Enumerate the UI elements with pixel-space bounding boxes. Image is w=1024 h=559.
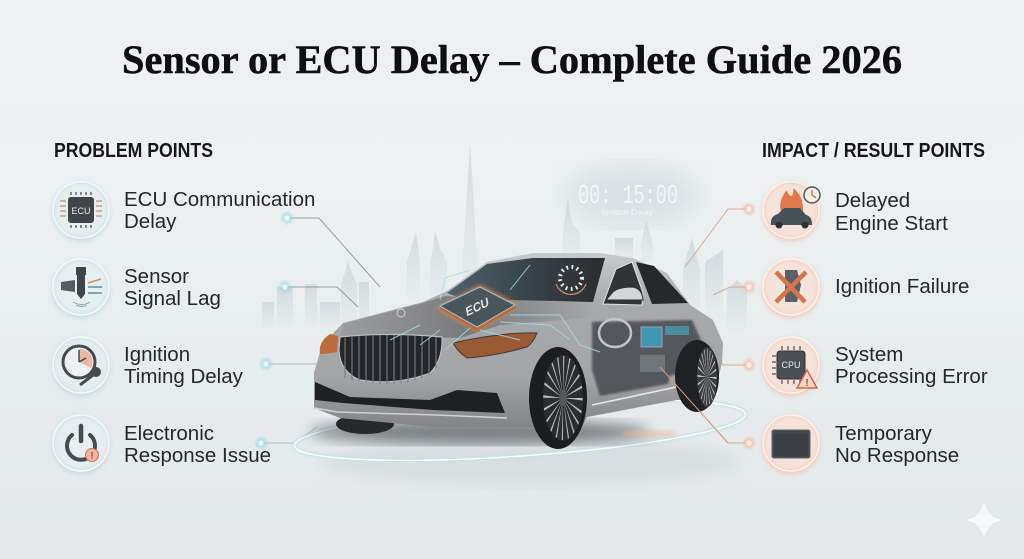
icon: crossed ignition xyxy=(763,259,819,315)
icon: blank window xyxy=(763,415,819,471)
label: Delayed xyxy=(835,189,910,212)
loading spinner xyxy=(560,267,582,289)
icon: sensor xyxy=(53,259,109,315)
label: Electronic xyxy=(124,422,214,445)
item: electronic response issue xyxy=(53,415,271,471)
heading: impact points: IMPACT / RESULT POINTS xyxy=(762,140,985,162)
timer digits: 00: 15:00 xyxy=(578,182,678,212)
chrome strip xyxy=(314,408,507,418)
item: delayed engine start xyxy=(763,182,948,238)
car shadow xyxy=(310,420,650,444)
hood xyxy=(340,296,600,338)
orange sparks xyxy=(622,430,678,438)
icon: power warning xyxy=(53,415,109,471)
chip label: ECU xyxy=(464,294,490,320)
front wheel xyxy=(529,347,587,449)
label: No Response xyxy=(835,444,959,467)
grille xyxy=(339,334,442,384)
transparent interior xyxy=(592,319,701,396)
label: Ignition xyxy=(124,343,190,366)
title: Sensor or ECU Delay – Complete Guide 2026 xyxy=(122,37,902,82)
digital timer xyxy=(566,165,698,225)
label: Ignition Failure xyxy=(835,275,969,298)
icon: CPU warning xyxy=(763,337,819,393)
label: Temporary xyxy=(835,422,933,445)
icon: CPU warning: ! xyxy=(805,378,809,389)
icon: clock and key xyxy=(53,337,109,393)
side mirror xyxy=(606,287,643,300)
lower intake xyxy=(315,382,505,413)
icon glows xyxy=(52,183,820,474)
ignition trace xyxy=(660,367,728,443)
car xyxy=(310,253,728,449)
circuit traces xyxy=(390,265,600,352)
item: sensor signal lag xyxy=(53,259,221,315)
panel: problem points xyxy=(53,140,315,471)
rear wheel xyxy=(675,340,719,412)
hood emblem xyxy=(397,309,405,317)
glowing floor ring xyxy=(293,388,747,472)
sill line xyxy=(592,385,686,405)
connector dots: impact points xyxy=(743,203,755,449)
front side window xyxy=(603,262,643,305)
icon: sparkle watermark xyxy=(966,501,1002,539)
label: Delay xyxy=(124,210,177,233)
front left tyre xyxy=(336,414,394,434)
item: ignition failure xyxy=(763,259,969,315)
windshield xyxy=(447,258,605,302)
icon: car on fire with stopwatch xyxy=(763,182,820,238)
city skyline xyxy=(262,145,747,335)
icon: power warning: ! xyxy=(90,451,94,462)
connector dots: problem points xyxy=(255,212,293,449)
floor reflection xyxy=(320,438,740,486)
item: ignition timing delay xyxy=(53,337,244,393)
label: Processing Error xyxy=(835,365,988,388)
connector lines: problem points xyxy=(261,218,380,443)
item: temporary no response xyxy=(763,415,959,471)
timer caption: Ignition Delay xyxy=(601,208,653,217)
label: Sensor xyxy=(124,265,189,288)
label: Timing Delay xyxy=(124,365,244,388)
connector lines: impact points xyxy=(660,209,749,443)
steering wheel xyxy=(599,319,631,347)
ECU chip xyxy=(437,285,518,331)
label: Engine Start xyxy=(835,212,948,235)
left headlight xyxy=(320,334,338,354)
label: Signal Lag xyxy=(124,287,221,310)
panel: impact points xyxy=(762,140,988,471)
icon: CPU warning: CPU xyxy=(781,360,801,370)
label: ECU Communication xyxy=(124,188,315,211)
heading: problem points: PROBLEM POINTS xyxy=(54,140,213,162)
item: ECU communication delay xyxy=(53,182,315,238)
item: system processing error xyxy=(763,337,988,393)
icon: ECU chip xyxy=(53,182,109,238)
dashboard gauge xyxy=(556,284,586,294)
rear side window xyxy=(636,262,688,304)
right headlight xyxy=(453,333,537,358)
infotainment screen xyxy=(641,327,662,347)
label: System xyxy=(835,343,903,366)
car body xyxy=(314,253,723,430)
label: Response Issue xyxy=(124,444,271,467)
icon: ECU chip: ECU xyxy=(71,206,91,216)
